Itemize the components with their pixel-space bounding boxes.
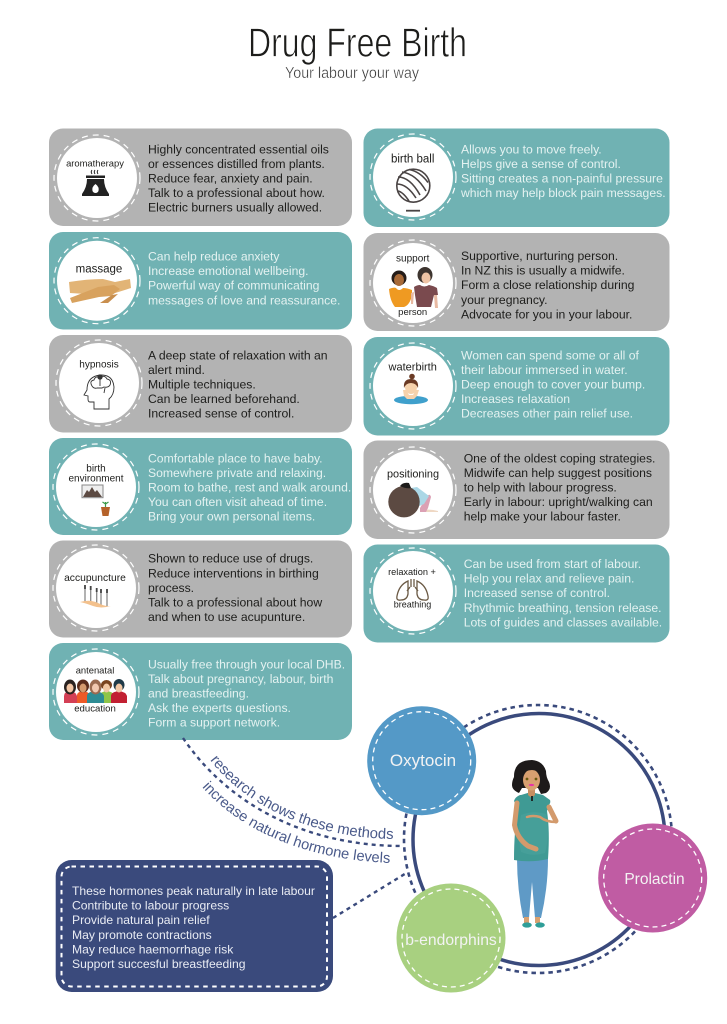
panel: waterbirth (364, 337, 670, 436)
panel: hypnosis: alert mind. (148, 363, 205, 377)
panel: birth environment: Room to bathe, rest and walk around. (148, 480, 351, 494)
panel: hormone benefits: Provide natural pain relief (72, 913, 210, 927)
panel: hormone benefits: These hormones peak naturally in late labour (72, 884, 315, 898)
panel: waterbirth: their labour immersed in water. (461, 363, 628, 377)
hormone: oxytocin: Oxytocin (390, 751, 456, 770)
figure: pregnant woman (512, 760, 556, 928)
panel: positioning (364, 440, 670, 539)
panel: accupuncture: and when to use acupunture. (148, 610, 305, 624)
panel: accupuncture: process. (148, 581, 194, 595)
panel: antenatal education: education (74, 704, 116, 715)
icon: two women (389, 267, 438, 308)
title: Drug Free Birth (248, 20, 467, 66)
panel: relaxation and breathing: relaxation + (388, 567, 436, 577)
panel: accupuncture: Reduce interventions in birthing (148, 566, 319, 580)
panel: antenatal education: antenatal (76, 664, 114, 676)
panel: birth ball: birth ball (391, 154, 434, 166)
panel: hypnosis: hypnosis (79, 360, 119, 371)
panel: relaxation and breathing: Rhythmic breathing, tension release. (464, 601, 662, 615)
panel: relaxation and breathing: breathing (394, 600, 431, 610)
icon: group of women (64, 679, 127, 703)
icon: picture and plant (82, 485, 110, 516)
icon: head with brain (84, 375, 114, 409)
inner solid ring (413, 714, 665, 966)
hormone: oxytocin (367, 706, 476, 815)
panel: support person (364, 233, 670, 331)
panel: massage (49, 232, 352, 330)
panel: birth environment (49, 438, 352, 535)
panel: aromatherapy: Reduce fear, anxiety and pain. (148, 172, 313, 186)
panel: relaxation and breathing: Can be used from start of labour. (464, 557, 641, 571)
panel: birth ball: which may help block pain messages. (460, 186, 666, 200)
panel: aromatherapy: Electric burners usually allowed. (148, 201, 322, 215)
icon: oil burner (82, 170, 109, 196)
icon: woman in water (394, 374, 428, 404)
panel: hormone benefits: May promote contractions (72, 928, 212, 942)
panel: birth environment: birth (86, 464, 106, 475)
connector: dashed link from hormones to info box (333, 872, 408, 918)
panel: hypnosis (49, 335, 352, 432)
panel: antenatal education: Form a support network. (148, 716, 280, 730)
curved caption: research shows these methods: research shows these methods (210, 756, 393, 839)
connector: dashed link from methods to hormones (183, 738, 403, 846)
panel: hypnosis: A deep state of relaxation with an (148, 348, 328, 362)
hormone: prolactin (598, 824, 707, 932)
hormone: b-endorphins: b-endorphins (405, 932, 497, 949)
icon: hands (69, 279, 131, 303)
panel: antenatal education: and breastfeeding. (148, 686, 249, 700)
icon: lungs (397, 579, 428, 600)
panel: hormone benefits: Support succesful breastfeeding (72, 957, 245, 971)
panel: massage: Can help reduce anxiety (148, 250, 279, 264)
panel: support person: Supportive, nurturing person. (461, 249, 618, 263)
panel: accupuncture: accupuncture (64, 573, 126, 584)
panel: hypnosis: Increased sense of control. (148, 407, 294, 421)
panel: birth environment: environment (68, 474, 124, 485)
panel: aromatherapy: aromatherapy (66, 158, 124, 168)
panel: positioning: help make your labour faster. (464, 510, 621, 524)
panel: massage: Increase emotional wellbeing. (148, 264, 309, 278)
panel: support person: In NZ this is usually a midwife. (461, 264, 625, 278)
panel: relaxation and breathing: Help you relax and relieve pain. (464, 572, 634, 586)
icon: ball (397, 169, 430, 211)
panel: antenatal education: Talk about pregnancy, labour, birth (148, 672, 333, 686)
panel: hormone benefits (56, 860, 333, 992)
panel: antenatal education (49, 643, 352, 740)
panel: accupuncture: Talk to a professional about how (148, 596, 322, 610)
panel: support person: your pregnancy. (461, 293, 548, 307)
panel: birth ball: Helps give a sense of control. (461, 157, 621, 171)
hormone: prolactin: Prolactin (624, 871, 685, 888)
panel: massage: massage (76, 264, 122, 276)
panel: relaxation and breathing: Increased sense of control. (464, 586, 610, 600)
panel: aromatherapy: Talk to a professional about how. (148, 186, 325, 200)
panel: aromatherapy: Highly concentrated essential oils (148, 142, 329, 156)
panel: hypnosis: Multiple techniques. (148, 378, 256, 392)
panel: positioning: Midwife can help suggest positions (464, 466, 652, 480)
panel: antenatal education: Usually free through your local DHB. (148, 657, 345, 671)
panel: massage: messages of love and reassurance. (148, 293, 340, 307)
panel: positioning: positioning (387, 468, 439, 480)
panel: massage: Powerful way of communicating (148, 279, 319, 293)
panel: birth ball (364, 128, 670, 227)
hormone: b-endorphins (396, 884, 506, 992)
panel: positioning: to help with labour progress. (464, 480, 617, 494)
subtitle: Your labour your way (285, 65, 419, 82)
panel: birth ball: Allows you to move freely. (461, 142, 602, 156)
panel: hormone benefits: Contribute to labour progress (72, 899, 229, 913)
panel: accupuncture: Shown to reduce use of drugs. (148, 552, 313, 566)
panel: birth environment: You can often visit ahead of time. (148, 495, 327, 509)
panel: waterbirth: Increases relaxation (461, 392, 570, 406)
panel: support person: Advocate for you in your labour. (461, 307, 632, 321)
panel: birth environment: Bring your own personal items. (148, 510, 315, 524)
panel: aromatherapy: or essences distilled from plants. (148, 157, 325, 171)
panel: waterbirth: Decreases other pain relief use. (461, 407, 633, 421)
panel: antenatal education: Ask the experts questions. (148, 701, 291, 715)
panel: birth environment: Comfortable place to have baby. (148, 451, 323, 465)
panel: support person: Form a close relationship during (461, 278, 634, 292)
curved caption: increase natural hormone levels: increase natural hormone levels (202, 780, 390, 863)
panel: hypnosis: Can be learned beforehand. (148, 392, 300, 406)
icon: needles (80, 585, 111, 608)
panel: accupuncture (49, 540, 352, 638)
icon: woman leaning on ball (388, 483, 438, 517)
panel: positioning: One of the oldest coping strategies. (464, 451, 655, 465)
panel: aromatherapy (49, 128, 352, 226)
panel: support person: person (398, 307, 427, 318)
panel: birth ball: Sitting creates a non-painful pressure (461, 172, 663, 186)
panel: birth environment: Somewhere private and relaxing. (148, 466, 326, 480)
panel: waterbirth: Deep enough to cover your bump. (461, 378, 645, 392)
panel: hormone benefits: May reduce haemorrhage risk (72, 942, 234, 956)
panel: support person: support (396, 254, 430, 265)
panel: waterbirth: waterbirth (388, 362, 437, 374)
panel: relaxation and breathing: Lots of guides and classes available. (464, 615, 662, 629)
panel: relaxation and breathing (364, 544, 670, 642)
outer dashed ring (404, 705, 672, 973)
panel: waterbirth: Women can spend some or all of (461, 348, 639, 362)
panel: positioning: Early in labour: upright/walking can (464, 495, 653, 509)
